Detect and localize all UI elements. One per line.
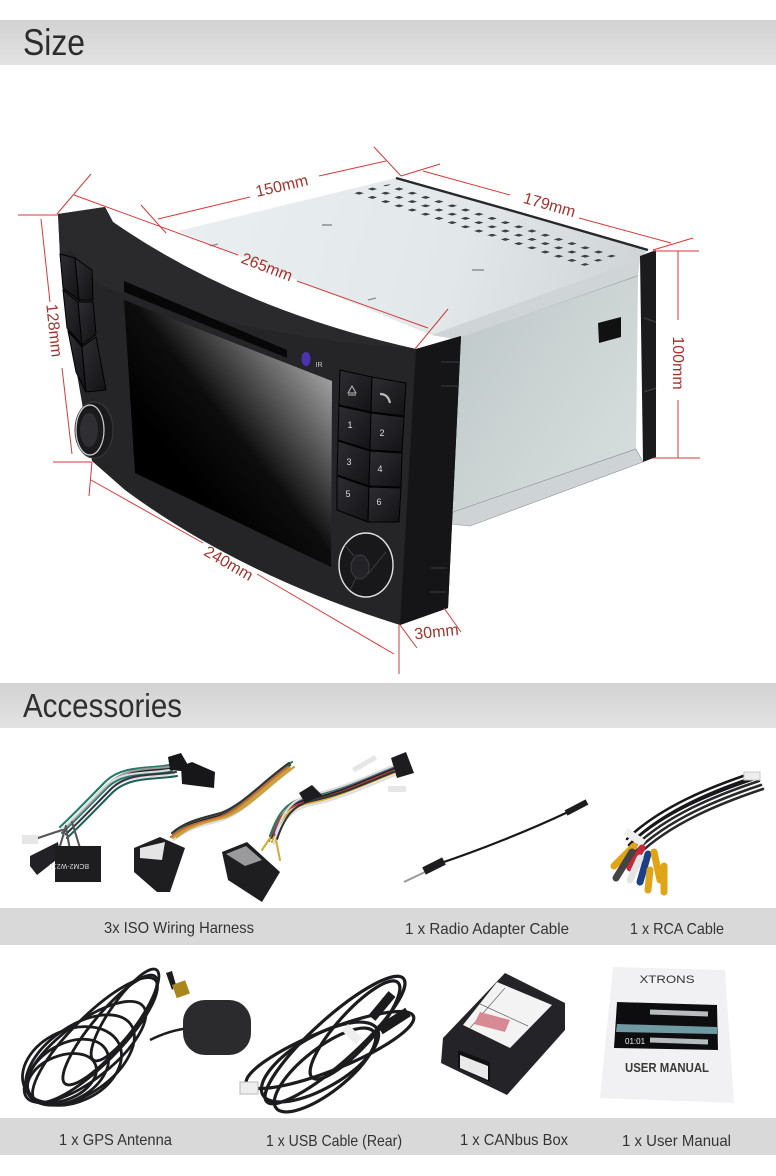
caption bar: row one: 1 x Radio Adapter Cable [405,921,569,938]
accessory: radio adapter cable [404,802,587,882]
rail edge line [458,276,638,339]
caption bar: row two [0,1118,776,1155]
caption bar: row one: 1 x RCA Cable [630,921,724,938]
dimension: 30mm: 30mm [414,622,460,643]
chassis rail [431,259,640,340]
dimension: 128mm [18,215,92,462]
dimension: 179mm [401,164,693,250]
chassis side [453,276,638,512]
rear bracket [640,250,656,462]
caption bar: row two: 1 x CANbus Box [460,1132,568,1149]
harness two [171,762,294,840]
chassis bottom rail [450,449,643,526]
caption bar: row one [0,908,776,945]
bezel top lip [58,207,416,349]
metal chassis top [178,178,648,335]
phone icon [380,394,390,403]
chassis top edge [396,178,648,250]
button digits: 2 [379,428,385,438]
button digits: 4 [377,464,383,474]
accessory: CANbus box [441,973,565,1095]
dimension: 128mm: 128mm [42,303,65,358]
dimension: 240mm [89,462,399,674]
harness three [262,763,401,860]
chassis clips [210,225,484,300]
dimension: 179mm: 179mm [521,190,577,221]
button digits: 1 [347,420,353,430]
accessory: user manual: XTRONS [640,974,694,986]
button digits: 3 [346,457,352,467]
product: car stereo head unit [58,178,656,625]
button digits [345,420,385,507]
disc slot [124,281,287,358]
preset buttons [337,370,406,522]
caption bar: row two: 1 x User Manual [622,1133,731,1150]
volume knob [75,402,113,458]
GPS puck [183,1000,251,1055]
caption bar: row two: 1 x USB Cable (Rear) [266,1133,402,1150]
display screen [124,300,332,567]
bezel right strip [400,336,461,625]
accessory: USB cable [239,962,421,1126]
header: Size [0,20,776,65]
eject icon [348,386,356,395]
IR sensor: IR [316,362,322,369]
navigation pad [339,533,393,597]
button digits: 5 [345,489,351,499]
header: Size: Size [23,22,85,63]
harness label: BCM2-W211 [49,862,89,869]
dimension: 265mm [57,174,448,349]
header: Accessories: Accessories [23,687,182,724]
dimension: 150mm [141,147,401,233]
header: Accessories [0,683,776,728]
harness one [38,765,177,850]
accessory: ISO wiring harness set [22,752,414,902]
accessory: user manual: 01:01 [625,1037,646,1046]
left buttons [60,254,106,392]
dimension: 100mm: 100mm [669,336,686,390]
dimension: 100mm [653,251,700,458]
chassis ventilation holes [349,183,622,266]
strip notches [430,362,459,592]
bracket notches [644,318,656,392]
IR sensor [302,352,322,369]
front bezel [58,207,461,625]
chassis side opening [598,317,621,343]
accessory: user manual [600,967,734,1103]
RCA plugs [614,846,664,892]
dimension: 150mm: 150mm [254,172,310,201]
dimension: 240mm: 240mm [201,543,256,585]
button digits: 6 [376,497,382,507]
accessory: user manual: USER MANUAL [625,1060,709,1075]
caption bar: row one: 3x ISO Wiring Harness [104,920,254,937]
accessory: RCA cable [614,772,763,892]
dimension: 30mm [400,608,461,648]
caption bar: row two: 1 x GPS Antenna [59,1132,172,1149]
dimension: 265mm: 265mm [239,250,295,285]
accessory: GPS antenna [9,961,251,1123]
